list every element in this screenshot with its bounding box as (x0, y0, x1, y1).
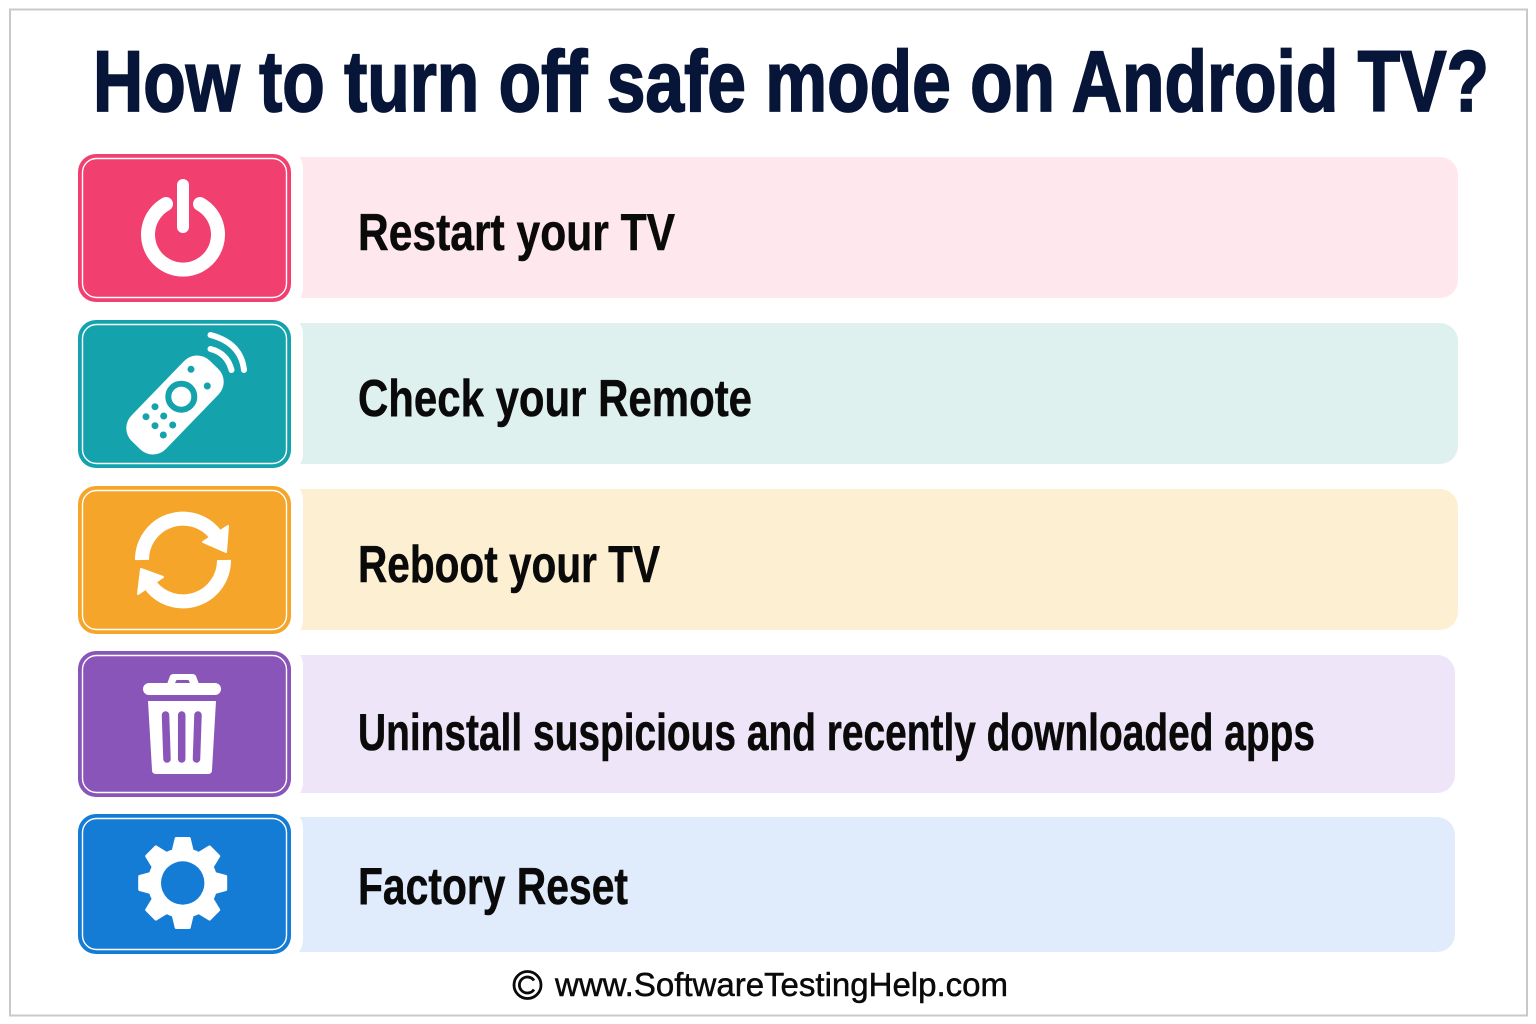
step 3 label: Reboot your TV (358, 536, 660, 594)
panel: step 4 uninstall (70, 645, 1455, 803)
step 5 icon tile (78, 814, 291, 954)
step 3 icon halo (70, 480, 303, 640)
step 4 icon tile (78, 651, 291, 797)
footer credit (514, 966, 1008, 1003)
step 1 label: Restart your TV (358, 204, 675, 262)
step 4 bar (298, 655, 1455, 793)
icon: remote control (119, 335, 244, 462)
panel: step 1 restart (70, 148, 1458, 308)
step 4 icon halo (70, 645, 303, 803)
icon: copyright (514, 972, 541, 998)
step 2 icon halo (70, 314, 303, 474)
step 2 bar (298, 323, 1458, 464)
step 5 bar (298, 817, 1455, 952)
panel: step 5 factory reset (70, 808, 1455, 960)
step 3 icon tile (78, 486, 291, 634)
panel: step 2 remote (70, 314, 1458, 474)
icon: trash can (143, 674, 221, 774)
step 5 icon halo (70, 808, 303, 960)
panel: step 3 reboot (70, 480, 1458, 640)
icon: refresh arrows (138, 519, 228, 601)
icon: gear (140, 838, 226, 928)
step 2 label: Check your Remote (358, 370, 752, 428)
step 2 icon tile (78, 320, 291, 468)
step 1 bar (298, 157, 1458, 298)
website text: www.SoftwareTestingHelp.com (554, 966, 1008, 1003)
icon: power (148, 185, 218, 270)
step 5 label: Factory Reset (358, 858, 628, 916)
step 3 bar (298, 489, 1458, 630)
step 1 icon halo (70, 148, 303, 308)
step 1 icon tile (78, 154, 291, 302)
